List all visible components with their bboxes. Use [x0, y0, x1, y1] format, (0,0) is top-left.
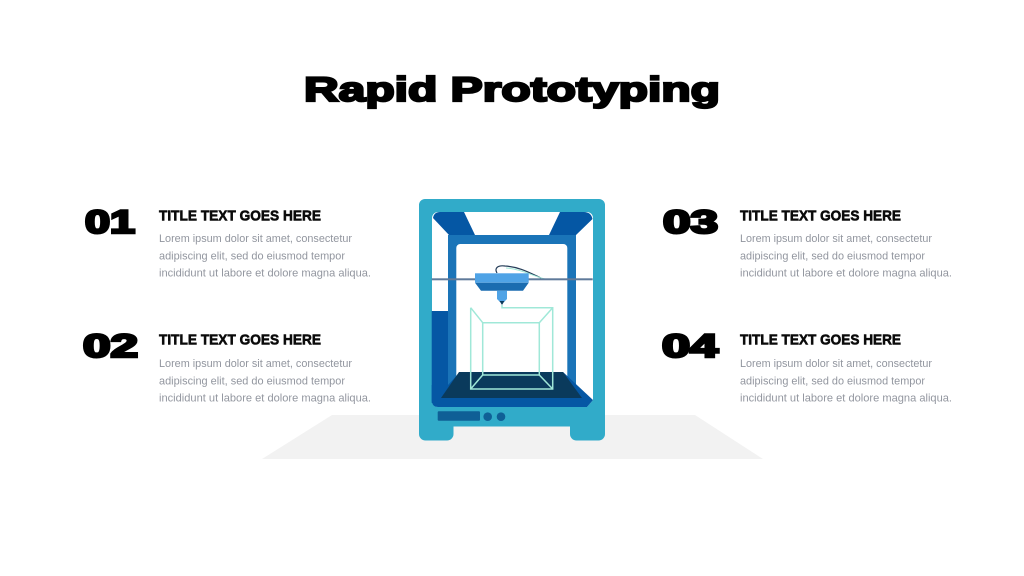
left lower column [432, 311, 449, 403]
control panel display [438, 411, 480, 421]
body 02: incididunt ut labore et dolore magna aliqua. [159, 392, 371, 404]
filament highlight [506, 268, 545, 279]
body 04: adipiscing elit, sed do eiusmod tempor [740, 376, 925, 388]
print bed base [432, 372, 593, 407]
body 04: Lorem ipsum dolor sit amet, consectetur [740, 358, 932, 370]
body 03: Lorem ipsum dolor sit amet, consectetur [740, 233, 932, 245]
printed cube wireframe [471, 305, 553, 389]
filament [496, 266, 541, 278]
print head carriage [475, 273, 529, 283]
body 04: incididunt ut labore et dolore magna aliqua. [740, 392, 952, 404]
inner frame [448, 235, 576, 385]
number 01: 01 [85, 204, 135, 240]
body 03: incididunt ut labore et dolore magna aliqua. [740, 268, 952, 280]
body 02: adipiscing elit, sed do eiusmod tempor [159, 376, 345, 388]
print bed surface [441, 372, 582, 398]
nozzle [497, 291, 507, 302]
top left brace [433, 212, 475, 235]
item 03 [663, 204, 952, 280]
item 04 [662, 328, 952, 404]
heading 03: TITLE TEXT GOES HERE [740, 208, 901, 224]
number 04: 04 [662, 328, 718, 364]
body 01: Lorem ipsum dolor sit amet, consectetur [159, 233, 352, 245]
body 02 [159, 358, 371, 404]
nozzle tip [500, 301, 504, 305]
body 01: incididunt ut labore et dolore magna aliqua. [159, 268, 371, 280]
body 01 [159, 233, 371, 280]
heading 01: TITLE TEXT GOES HERE [159, 208, 321, 224]
title: Rapid Prototyping [304, 71, 720, 109]
top right brace [549, 212, 592, 235]
body 02: Lorem ipsum dolor sit amet, consectetur [159, 358, 352, 370]
heading 04: TITLE TEXT GOES HERE [740, 332, 901, 348]
control button 2 [497, 412, 505, 421]
body 03 [740, 233, 952, 280]
number 02: 02 [83, 328, 138, 364]
heading 02: TITLE TEXT GOES HERE [159, 332, 321, 348]
body 04 [740, 358, 952, 404]
control button 1 [483, 412, 492, 421]
floor shadow [262, 415, 763, 459]
body 03: adipiscing elit, sed do eiusmod tempor [740, 250, 925, 262]
item 01 [85, 204, 371, 280]
printer outer frame [419, 199, 605, 440]
rail [432, 278, 593, 280]
printer inner opening [432, 212, 593, 407]
number 03: 03 [663, 204, 718, 240]
print head lower [475, 283, 529, 291]
illustration: 3D printer [419, 199, 605, 440]
item 02 [83, 328, 371, 404]
body 01: adipiscing elit, sed do eiusmod tempor [159, 250, 345, 262]
